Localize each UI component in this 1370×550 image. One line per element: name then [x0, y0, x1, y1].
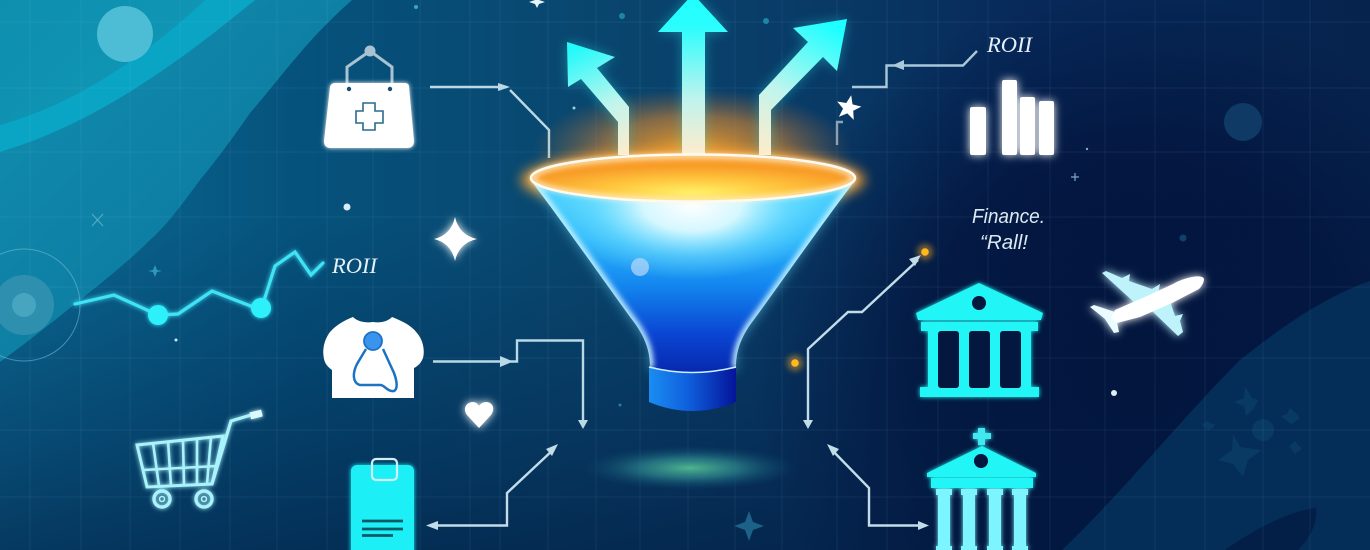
left wave shapes	[0, 0, 352, 362]
arrow: left	[567, 42, 629, 155]
icon: coat with stethoscope	[323, 317, 424, 398]
funnel collar	[649, 367, 736, 411]
icon: bank upper	[916, 283, 1043, 397]
funnel highlight	[631, 258, 649, 276]
arrow: right	[759, 19, 847, 155]
icon: shopping cart	[137, 410, 263, 507]
orange dots	[787, 244, 933, 371]
ROI line chart	[75, 252, 323, 325]
label: Finance Rall	[972, 206, 1045, 254]
pool of light under funnel	[582, 446, 798, 490]
connector: bag to funnel	[430, 83, 549, 158]
arrow: centre	[658, 0, 728, 155]
funnel rim	[531, 154, 855, 202]
right wave shape	[1062, 281, 1370, 550]
label: Finance Rall: “Rall!	[980, 232, 1028, 254]
funnel cone	[532, 183, 854, 372]
decorative circles	[0, 6, 1262, 361]
label: Finance Rall: Finance.	[972, 206, 1045, 228]
connector: clipboard to centre	[426, 444, 558, 530]
connector: orange dot to centre	[803, 255, 921, 429]
icon: medical bag	[324, 46, 414, 148]
small sparkles and dots	[148, 0, 1186, 541]
funnel	[531, 130, 855, 411]
icon: star	[834, 93, 863, 121]
connector: coat to centre	[433, 340, 588, 429]
label: ROII left: ROII	[331, 253, 379, 278]
icon: bank lower	[927, 428, 1036, 550]
plane wings and tail	[1102, 271, 1160, 303]
connector: top right ROII to star	[837, 51, 977, 145]
sparkle star	[434, 217, 477, 261]
funnel glow	[521, 88, 865, 370]
label: ROII top right: ROII	[986, 32, 1034, 57]
icon: heart	[465, 402, 493, 428]
icon: airplane	[1090, 271, 1204, 336]
plane fuselage	[1111, 276, 1204, 323]
icon: clipboard	[351, 459, 414, 550]
connector: lower bank to centre	[827, 444, 929, 530]
icon: bar chart	[970, 80, 1054, 155]
